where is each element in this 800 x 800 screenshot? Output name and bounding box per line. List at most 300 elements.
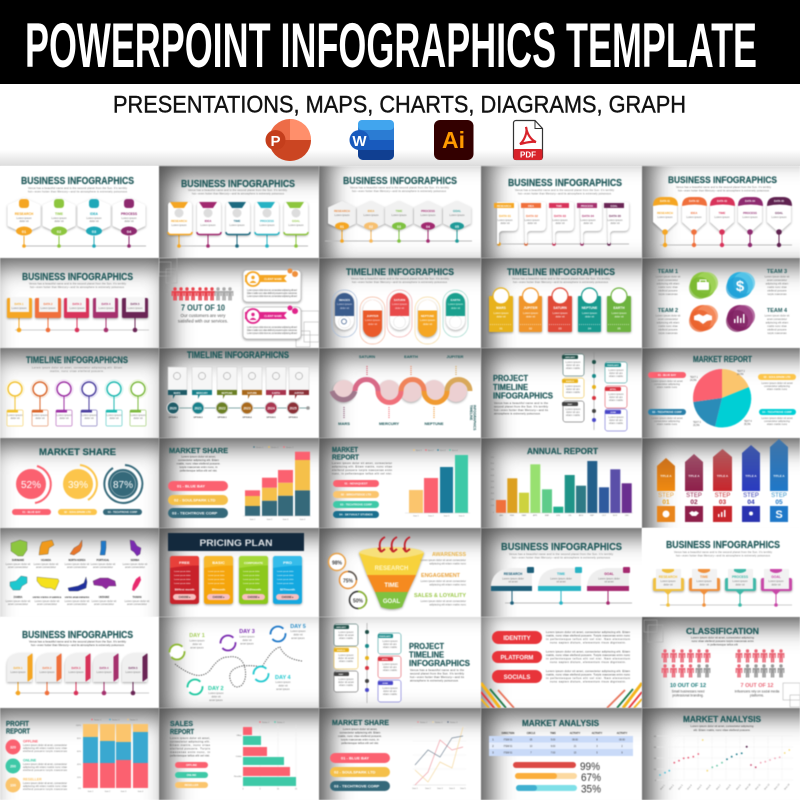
funnel labels: TIME <box>384 583 399 589</box>
heading: REPORT <box>170 729 195 736</box>
stacked percent chart: Item 3 <box>121 790 127 793</box>
card: process: PROCESS <box>260 219 274 223</box>
card: research <box>168 202 192 235</box>
card: process: 04 <box>127 229 132 234</box>
plan: basic: Lorem ipsum dolor <box>208 583 225 585</box>
pill: mars: Lorem ipsum <box>337 302 352 306</box>
pill: techtrove: 03 - TECHTROVE CORP <box>334 784 380 788</box>
card: data 5: DATA 5 <box>129 666 138 670</box>
panel: annual report <box>481 438 642 528</box>
plan: corporate: Lorem ipsum dolor <box>243 579 260 581</box>
card: research: sit amet <box>508 580 518 584</box>
legend: soulspark: etiam mattis nunc <box>767 387 788 391</box>
map: serbia: amet consectetur <box>125 565 145 569</box>
card: march <box>334 647 358 669</box>
heading: BUSINESS INFOGRAPHICS <box>22 630 133 641</box>
card: process: Lorem ipsum <box>260 223 274 227</box>
heading: TIMELINE <box>409 650 445 660</box>
gauge: 98% <box>328 554 346 570</box>
map: portugal <box>91 541 116 569</box>
description: Lorem ipsum dolor sit amet, consectetur adipiscing <box>691 636 754 640</box>
team 2 text: mattis nunc vitae <box>658 324 678 328</box>
option 2020: MARS <box>174 392 181 395</box>
day 1 <box>170 633 205 660</box>
card: idea: Lorem ipsum <box>86 216 102 220</box>
card: research <box>653 197 678 245</box>
card: time <box>549 202 574 244</box>
planet labels: NEPTUNE <box>424 421 444 426</box>
option 2023 <box>241 367 262 419</box>
card: data 3 <box>65 653 90 682</box>
heading: PROJECT <box>409 642 444 651</box>
block: saturn: Lorem ipsum <box>552 311 568 315</box>
heading: TIMELINE INFOGRAPHICNS <box>26 355 128 365</box>
step 1 <box>657 458 675 522</box>
item: offline: eleifend posuere turpis maecenas <box>23 749 68 753</box>
card: february: FEBRUARY <box>607 364 620 367</box>
option 2025: JUPITER <box>294 393 304 395</box>
scatter chart: 30 <box>654 747 657 749</box>
day 4: amet ipsum <box>276 687 290 691</box>
pill: techtrove: 03 - TECHTROVE CORP <box>108 510 137 514</box>
card: time <box>538 567 582 591</box>
day 2: amet ipsum <box>209 698 223 702</box>
description <box>674 550 773 558</box>
scatter chart: Item 5 <box>696 783 703 791</box>
panel: business infographics medals <box>159 166 319 258</box>
panel: market share line chart <box>319 708 481 800</box>
funnel labels: GOAL <box>383 599 400 605</box>
map: taiwan: amet consectetur <box>127 602 147 606</box>
day 3 <box>220 629 255 650</box>
card: march: MARCH <box>337 649 345 652</box>
card: june: JUNE <box>382 683 388 685</box>
pie labels: TEXT 1 <box>690 377 698 379</box>
block: neptune <box>578 288 601 332</box>
icon: green blob briefcase <box>689 272 718 299</box>
map: taiwan: Lorem ipsum dolor sit <box>125 599 150 603</box>
card: march: MARCH <box>566 380 574 383</box>
bar chart: JAN <box>499 514 503 517</box>
panel: business infographics speech tags <box>481 166 642 258</box>
pill: jupiter: Lorem ipsum <box>365 318 380 322</box>
map: portugal: Lorem ipsum dolor sit <box>91 562 116 566</box>
step 1: TITLE A <box>660 474 672 478</box>
table: ACTIVITY <box>592 732 603 735</box>
item: online: Lorem ipsum dolor sit amet, consectetur <box>23 762 67 766</box>
heading: BUSINESS INFOGRAPHICS <box>343 176 457 187</box>
table: 10 <box>530 746 533 748</box>
card: idea: Lorem ipsum <box>200 223 216 227</box>
option 2021: OPTION 2 <box>193 417 204 419</box>
card: data 2 <box>36 653 61 682</box>
plan: pro <box>273 556 302 604</box>
pill: techtrove: 03 - TECHTROVE CORP <box>172 510 218 516</box>
plan: pro: Lorem ipsum dolor <box>277 583 294 585</box>
icon: orange blob handshake <box>689 305 718 332</box>
card: research: RESEARCH <box>497 205 511 208</box>
legend: techtrove: Lorem ipsum dolor sit amet <box>651 416 683 420</box>
card: goal: Lorem ipsum <box>768 579 784 583</box>
scatter chart: Item 14 <box>783 783 791 791</box>
description <box>676 185 772 192</box>
team 1 text <box>656 269 681 296</box>
card: april: APRIL <box>382 658 389 661</box>
step 6: dolor sit <box>133 416 143 420</box>
icon: red arrows <box>378 537 410 552</box>
pictogram: 7 of 12 <box>736 649 784 678</box>
card: time <box>44 199 74 236</box>
option 2020: 2020 <box>169 406 177 410</box>
day 5 <box>270 624 306 642</box>
step 3: dolor sit <box>59 416 69 420</box>
plan: free: FREE <box>179 560 190 565</box>
description: eleifend posuere turpis maecenas enim <box>332 468 393 472</box>
option 2020 <box>167 367 187 419</box>
card: goal: GOAL <box>292 219 300 223</box>
card: time: TIME <box>234 219 240 223</box>
day 5: Lorem ipsum <box>290 629 306 633</box>
table: CIRCLE <box>527 733 536 735</box>
option 2022: NEPTUNE <box>222 393 233 395</box>
map: uganda: Lorem ipsum dolor sit <box>34 562 59 566</box>
card: idea: 02 <box>369 225 373 229</box>
card: time: DATA 03 <box>717 200 728 203</box>
heading: TIMELINE INFOGRAPHICS <box>507 267 615 278</box>
card: time <box>226 202 250 235</box>
card: idea <box>521 202 546 244</box>
text: identity: in pellentesque tellus elit vel nisi. Nam elementum <box>546 637 631 641</box>
card: may: Lorem ipsum <box>566 407 580 411</box>
card: time: Lorem ipsum <box>52 216 66 220</box>
description: Lorem ipsum dolor sit amet, consectetur <box>332 461 392 465</box>
legend: techtrove <box>648 409 686 426</box>
panel: business infographics half-domes <box>481 528 642 617</box>
pill: blue bay <box>168 481 228 491</box>
pie labels: 35,5% <box>744 424 751 426</box>
item: offline: OFFLINE <box>23 740 39 744</box>
step 6 <box>129 380 147 426</box>
card: data 1 <box>7 297 32 318</box>
team 1 text: TEAM 1 <box>658 269 678 275</box>
map: united states: amet consectetur <box>37 602 57 606</box>
card: goal: DATA 05 <box>609 214 621 218</box>
step 5: TITLE A <box>773 474 785 478</box>
card: idea <box>682 197 707 245</box>
stage: engagement: adipiscing elit etiam mattis nunc <box>429 582 467 586</box>
bar chart: MAY <box>545 514 550 517</box>
button: platform <box>492 651 542 663</box>
text: identity: nunc sapien dictum, elementum risus dignissim. <box>550 640 626 644</box>
stacked percent chart: 40% <box>77 764 81 766</box>
pie labels: TEXT 2 <box>737 371 745 373</box>
text: identity <box>546 630 631 644</box>
stage: sales and loyalty: SALES & LOYALITY <box>414 593 466 599</box>
table: ACTIVITY <box>570 732 581 735</box>
timeline axis <box>365 623 369 703</box>
panel: pricing plan <box>159 528 319 617</box>
stacked percent chart: Item 1 <box>88 790 94 793</box>
card: idea <box>79 199 109 236</box>
step 4: TITLE A <box>745 474 757 478</box>
card: process: PROCESS <box>581 205 593 208</box>
card: goal <box>587 567 630 591</box>
card: research: 01 <box>340 225 344 229</box>
button: socials <box>492 670 542 683</box>
card: data 5: Lorem ipsum <box>126 670 140 674</box>
pill: jupiter <box>363 300 382 337</box>
card: time: Lorem ipsum <box>714 215 730 219</box>
card: data 5 <box>122 297 148 318</box>
pill: novaquest: 01 - NOVAQUEST <box>344 482 368 486</box>
panel: business infographics boxed tabs <box>642 528 800 617</box>
description: Venus has a beautiful name and is the second planet from the Sun. It's terribly <box>28 186 128 190</box>
day 2: DAY 2 <box>208 686 224 692</box>
scatter chart: Item 7 <box>715 783 722 791</box>
team 2 text: turpis maecenas <box>658 331 678 335</box>
card: process: Lorem ipsum <box>122 216 136 220</box>
option 2025: OPTION 6 <box>288 417 299 419</box>
scatter chart <box>654 736 793 791</box>
card: march: dolor sit am <box>566 387 580 391</box>
icon: Illustrator: Ai <box>442 127 465 153</box>
card: may: MAY <box>339 673 344 676</box>
card: time <box>710 197 735 245</box>
card: may: etiam mattis <box>339 683 354 687</box>
panel: business infographics gray hexagons <box>319 166 481 258</box>
plan: corporate: CHOOSE ▸ <box>248 596 260 599</box>
stacked percent chart <box>76 719 148 793</box>
team 1 text: Lorem ipsum dolor sit <box>656 274 681 278</box>
step 2: TITLE A <box>688 474 700 478</box>
stage: engagement <box>421 573 467 586</box>
pill: offline <box>175 762 208 768</box>
item: reseller: adipiscing elit etiam mattis nunc vitae <box>23 784 68 788</box>
panel: classification <box>642 617 800 708</box>
stat: 7 of 12: platforms. <box>750 694 764 698</box>
card: april <box>605 386 627 408</box>
description: Lorem ipsum dolor sit amet, consectetur adipiscing <box>691 724 754 728</box>
team 4 text: eleifend posuere <box>767 328 787 332</box>
option 2022 <box>216 367 237 419</box>
stat: 10 of 12: 10 OUT OF 12 <box>670 683 706 689</box>
legend: techtrove 2: 04 - TECHTROVE CORP <box>762 410 792 414</box>
heading: BUSINESS INFOGRAPHICS <box>21 176 134 187</box>
table: ACTIVITY <box>617 732 628 735</box>
description: hot—even hotter than Mercury—and its <box>494 408 549 412</box>
legend: soulspark: 02 - SOULSPARK LTD <box>764 375 791 379</box>
card: research: DATA 01 <box>660 200 671 203</box>
progress: 35% <box>516 784 601 796</box>
horizontal bar chart: Series 1 <box>262 722 270 724</box>
line chart: Item 2 <box>425 787 432 790</box>
planet labels: SATURN <box>359 354 375 359</box>
day 1: dolor sit <box>192 642 202 646</box>
option 2023: SATURN <box>247 392 257 395</box>
scatter chart: 40 <box>654 736 657 738</box>
card: data 4: Lorem ipsum <box>98 306 114 310</box>
panel: five-day roadmap <box>159 617 319 708</box>
plan: pro: Lorem ipsum dolor <box>277 579 294 581</box>
team 1 text: adipiscing elit etiam <box>657 282 679 286</box>
card: time: dolor sit <box>54 219 64 223</box>
description: Venus has a beautiful name and is the second planet from the Sun. It's terribly <box>515 188 615 192</box>
pie labels: 24,5% <box>690 380 697 382</box>
pill: blue bay: 01 - BLUE BAY <box>341 756 369 760</box>
gauge: 50% <box>350 592 367 608</box>
line chart: Series 2 <box>435 722 443 724</box>
heading <box>6 721 31 736</box>
plan: pro: Lorem ipsum dolor <box>277 575 294 577</box>
heading: BUSINESS INFOGRAPHICS <box>22 272 133 283</box>
plan: free: Lorem ipsum dolor <box>174 579 191 581</box>
description: Venus has a beautiful name and is the second planet from the Sun. It's terribly <box>509 552 614 556</box>
card: research: Lorem ipsum <box>498 218 512 222</box>
card: june: etiam mattis <box>609 421 624 425</box>
stacked percent chart: 60% <box>77 751 81 753</box>
plan: free: CHOOSE ▸ <box>179 596 191 599</box>
pill: brightedge <box>333 491 379 498</box>
description: second planet from the Sun. It's terribly <box>494 404 549 408</box>
description: Venus has a beautiful name and is the second planet from the Sun. It's terribly <box>512 276 611 280</box>
horizontal bar chart: 15 <box>295 788 298 790</box>
card: time: DATA 03 <box>554 214 566 218</box>
scatter chart: Item 1 <box>659 783 666 791</box>
day 1: amet ipsum <box>190 646 204 650</box>
pill: techtrove <box>330 781 390 791</box>
scatter chart: 0 <box>655 780 657 782</box>
map: ukraine <box>92 578 117 606</box>
heading: TIMELINE INFOGRAPHICS <box>346 267 454 278</box>
table: 7:00 <box>551 752 556 754</box>
card: client name orange: Lorem ipsum dolor sit amet, consectetur adipiscing elit sed <box>247 288 298 292</box>
card: time: Lorem ipsum <box>696 579 712 583</box>
scatter chart: Item 12 <box>763 783 771 791</box>
item: reseller: RESELLER <box>23 778 42 782</box>
card: data 2: Lorem ipsum <box>40 670 54 674</box>
team 1 text: mattis nunc vitae <box>658 285 678 289</box>
card: may: etiam mattis <box>566 413 581 417</box>
day 3: dolor sit <box>242 638 252 642</box>
card: idea: DATA 02 <box>689 200 700 203</box>
block: saturn <box>548 288 572 332</box>
text: identity: mattis, nunc vitae eleifend posuere. Turpis maecenas enim nunc <box>546 634 631 638</box>
stacked percent chart: Item 4 <box>138 790 144 793</box>
heading: MARKET ANALYSIS <box>683 715 762 724</box>
card: january: dolor sit amet <box>338 633 354 637</box>
legend: blue bay: consectetur adipiscing <box>654 382 680 386</box>
card: april <box>378 656 401 678</box>
description: maecenas enim nunc, in <box>170 750 210 754</box>
rotated label <box>469 405 476 431</box>
card: client name magenta: Etiam mattis nunc vitae eleifend posuere turpis maecenas <box>247 328 298 332</box>
stacked percent chart: 100% <box>76 725 81 727</box>
card: january: Lorem ipsum <box>566 360 580 364</box>
heading: BUSINESS INFOGRAPHICS <box>666 540 780 551</box>
day 3: amet ipsum <box>240 642 254 646</box>
step 4: STEP <box>743 493 759 499</box>
step 2: STEP <box>686 493 702 499</box>
description: hot—even hotter than Mercury—and its atmosphere is extremely poisonous <box>28 190 128 194</box>
card: february: etiam mattis <box>383 645 398 649</box>
card: process <box>114 199 144 236</box>
card: research: Lorem ipsum dolor <box>502 576 524 580</box>
stat: 10 of 12: professional branding. <box>672 694 704 698</box>
card: idea: IDEA <box>205 219 211 223</box>
team 4 text: turpis maecenas <box>767 331 787 335</box>
card: march: dolor sit amet <box>338 656 354 660</box>
block: mars: dolor sit <box>496 314 506 318</box>
day 5: DAY 5 <box>290 624 306 630</box>
description: mattis, nunc vitae eleifend posuere. <box>338 734 382 738</box>
item: online: eleifend posuere turpis maecenas <box>23 768 68 772</box>
scatter chart: Item 3 <box>677 783 684 791</box>
horizontal bar chart: Online <box>236 756 242 758</box>
step 4: dolor sit <box>84 416 94 420</box>
bar chart <box>405 449 470 518</box>
funnel labels <box>375 566 408 605</box>
card: client name orange: Etiam mattis nunc vitae eleifend posuere turpis maecenas <box>247 291 298 295</box>
option 2024: OPTION 5 <box>266 417 277 419</box>
step 3 <box>713 449 732 522</box>
table: 00:00 <box>619 740 626 742</box>
step 1: dolor sit <box>10 416 20 420</box>
heading <box>332 447 360 462</box>
stage: awareness: adipiscing elit etiam mattis nunc <box>429 562 467 566</box>
card: data 1: Lorem ipsum <box>10 670 26 674</box>
step 3: TITLE A <box>717 474 729 478</box>
icon: purple blob chart <box>726 305 755 332</box>
map: zambia: ZAMBIA <box>14 596 23 599</box>
line chart: Item 4 <box>449 787 456 790</box>
team 3 text: adipiscing elit etiam <box>766 282 788 286</box>
map: zambia: amet consectetur <box>8 602 28 606</box>
description: hot—even hotter than Mercury—and its atmosphere is extremely poisonous <box>352 189 447 193</box>
description <box>29 640 127 647</box>
card: goal: GOAL <box>610 205 618 208</box>
planet labels: EARTH <box>404 354 418 359</box>
card: process: PROCESS <box>121 212 138 216</box>
planet labels: MERCURY <box>379 421 399 426</box>
heading: MARKET REPORT <box>693 355 752 364</box>
card: may: dolor sit am <box>566 410 580 414</box>
card: time: TIME <box>556 205 562 208</box>
description: Venus has a beautiful name and is the second planet from the Sun. It's terribly <box>674 550 773 554</box>
step 1: Lorem ipsum <box>8 413 22 417</box>
card: march: etiam mattis <box>339 659 354 663</box>
card: april: APRIL <box>610 388 617 391</box>
line chart: Series 1 <box>420 722 428 724</box>
card: february <box>378 633 401 654</box>
legend: blue bay: 01 - BLUE BAY <box>658 373 676 377</box>
bar chart: 700 <box>491 469 495 471</box>
legend: techtrove 2: etiam mattis nunc <box>767 422 788 426</box>
card: research: 01 <box>22 229 27 234</box>
table: 05 <box>530 740 533 742</box>
card: idea: IDEA <box>90 212 99 216</box>
bar chart: 200 <box>491 499 495 501</box>
card: research: RESEARCH <box>15 212 34 216</box>
card: client name magenta: Lorem ipsum dolor sit amet, consectetur adipiscing elit sed <box>247 331 298 335</box>
card: client name orange <box>243 268 301 302</box>
heading: MARKET SHARE <box>39 447 116 458</box>
panel: market analysis scatter <box>642 708 800 800</box>
bar chart: Item 2 <box>428 449 434 452</box>
description: hot—even hotter than Mercury—and its atmosphere is extremely poisonous <box>676 554 771 558</box>
day 2: dolor sit <box>211 694 221 698</box>
pill: saturn: Lorem ipsum <box>392 302 407 306</box>
description: consectetur adipiscing elit. Etiam <box>178 458 220 462</box>
